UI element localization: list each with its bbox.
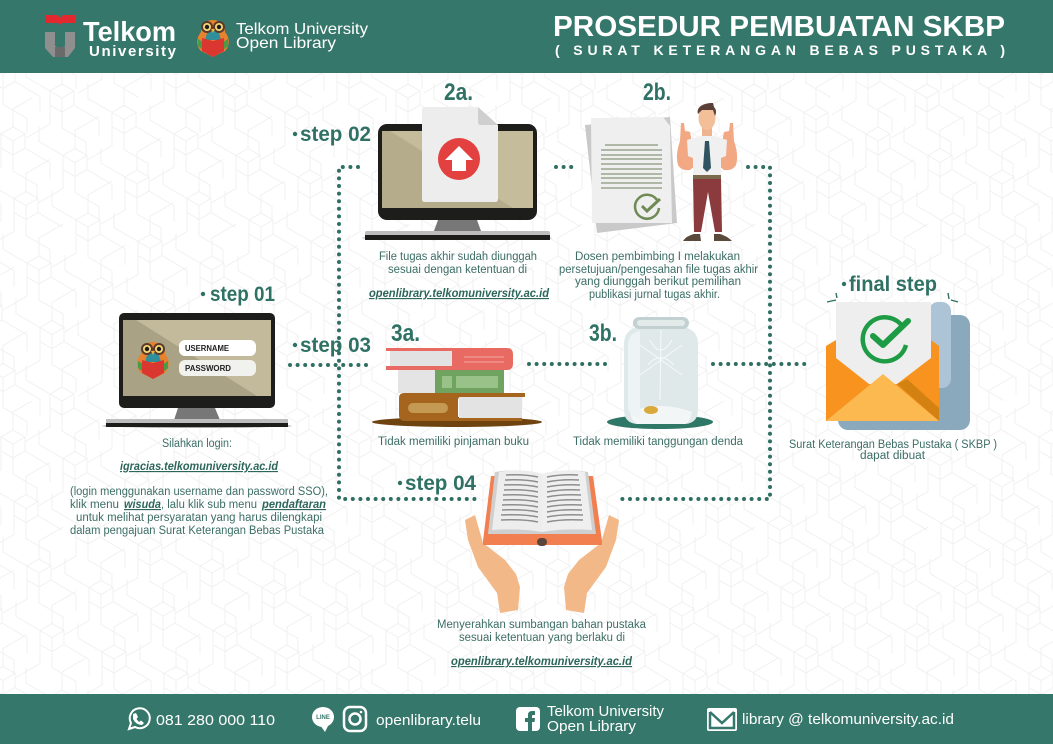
3b description: Tidak memiliki tanggungan denda	[573, 436, 744, 448]
step 04	[398, 470, 647, 668]
step 04 description: Menyerahkan sumbangan bahan pustaka	[437, 619, 647, 631]
step 01 description	[70, 438, 328, 537]
step 02 heading: step 02	[300, 123, 371, 146]
logo: Telkom University: University	[89, 43, 177, 60]
step 01 description: dalam pengajuan Surat Keterangan Bebas Pustaka	[70, 525, 325, 537]
3a label: 3a.	[391, 320, 420, 347]
icon: lecturer thumbs up	[677, 103, 737, 241]
2b description: Dosen pembimbing I melakukan	[575, 251, 740, 263]
step 01 description: igracias.telkomuniversity.ac.id	[120, 461, 279, 473]
icon: login monitor: USERNAME	[185, 344, 230, 353]
icon: hands holding book	[465, 470, 619, 613]
facebook name: Open Library	[547, 718, 637, 735]
icon: stack of books	[372, 348, 542, 427]
final step description	[789, 439, 997, 462]
step 01	[70, 283, 328, 537]
3b label: 3b.	[589, 320, 617, 347]
step 01 description: klik menu	[70, 499, 119, 511]
step 01 heading: step 01	[210, 283, 275, 306]
footer band	[0, 694, 1053, 744]
step 04 heading: step 04	[405, 472, 476, 495]
step 3a	[372, 320, 542, 448]
icon: approved document	[585, 117, 677, 233]
step 01 description: , lalu klik sub menu	[161, 499, 257, 511]
icon: empty jar with coin	[607, 317, 713, 429]
title: PROSEDUR PEMBUATAN SKBP	[553, 11, 1005, 43]
icon: facebook	[516, 707, 540, 731]
step 01 description: untuk melihat persyaratan yang harus dilengkapi	[76, 512, 322, 524]
step 2b	[559, 79, 758, 301]
step 03 heading: step 03	[300, 334, 371, 357]
2a description: openlibrary.telkomuniversity.ac.id	[369, 288, 550, 300]
icon: line	[312, 707, 334, 732]
subtitle: ( SURAT KETERANGAN BEBAS PUSTAKA )	[555, 42, 1005, 58]
icon: login monitor: PASSWORD	[185, 364, 231, 373]
dotted connectors	[290, 167, 809, 499]
icon: whatsapp	[129, 708, 150, 729]
icon: envelope with approved letter	[826, 293, 970, 430]
final step heading: final step	[849, 273, 937, 296]
final step description: dapat dibuat	[860, 450, 926, 462]
2b description: yang diunggah berikut pemilihan	[575, 276, 741, 288]
step 2a	[362, 79, 552, 300]
2a description: sesuai dengan ketentuan di	[388, 264, 527, 276]
header band	[0, 0, 1053, 73]
3a description: Tidak memiliki pinjaman buku	[378, 436, 529, 448]
logo: Telkom University: Telkom	[83, 16, 176, 47]
2b label: 2b.	[643, 79, 671, 106]
facebook name: Telkom University	[547, 703, 664, 720]
icon: login monitor	[102, 313, 292, 428]
step 04 description	[437, 619, 647, 668]
logo: Telkom University	[45, 15, 177, 60]
step 01 description: pendaftaran	[261, 499, 326, 511]
2b description: persetujuan/pengesahan file tugas akhir	[559, 264, 758, 276]
step 01 description: (login menggunakan username dan password SSO),	[70, 486, 328, 498]
step 04 description: sesuai ketentuan yang berlaku di	[459, 632, 625, 644]
logo: Open Library owl: Open Library	[236, 35, 336, 52]
logo: Open Library owl: Telkom University	[236, 21, 368, 38]
2a description: File tugas akhir sudah diunggah	[379, 251, 537, 263]
2b description: publikasi jurnal tugas akhir.	[589, 289, 720, 301]
step 3b	[573, 317, 744, 448]
facebook name	[547, 703, 664, 735]
logo: Open Library owl	[197, 20, 368, 57]
2b description	[559, 251, 758, 301]
icon: instagram	[344, 707, 366, 731]
phone number: 081 280 000 110	[156, 712, 275, 729]
step 04 description: openlibrary.telkomuniversity.ac.id	[451, 656, 633, 668]
final step	[789, 273, 997, 462]
email address: library @ telkomuniversity.ac.id	[742, 711, 954, 728]
icon: line: LINE	[316, 715, 330, 721]
instagram handle: openlibrary.telu	[376, 712, 481, 729]
step 01 description: wisuda	[124, 499, 162, 511]
icon: email	[707, 708, 737, 731]
final step description: Surat Keterangan Bebas Pustaka ( SKBP )	[789, 439, 997, 451]
2a description	[369, 251, 550, 300]
icon: monitor with upload document	[362, 107, 552, 240]
2a label: 2a.	[444, 79, 473, 106]
step 01 description: Silahkan login:	[162, 438, 232, 450]
